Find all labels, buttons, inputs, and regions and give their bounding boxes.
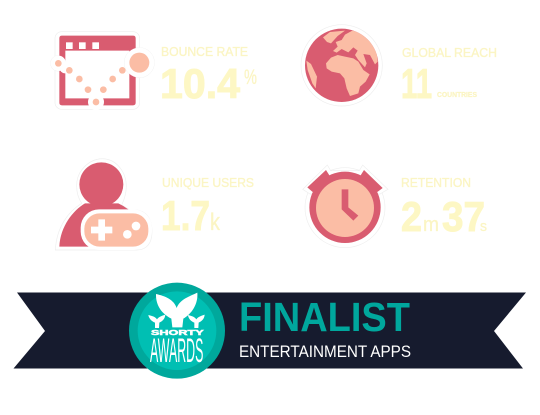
value: 2m 37s: m [423,214,439,236]
heading: finalist: FINALIST [239,294,410,340]
value: 1.7k: k [210,209,221,236]
panel: unique users [55,159,254,250]
value: 2m 37s: 37 [442,193,485,240]
icon: whale tails [148,293,205,328]
heading: bounce rate: BOUNCE RATE [161,45,248,59]
value: 2m 37s: s [480,218,487,235]
badge: shorty awards [129,283,225,379]
value: 10.4 percent: % [244,66,257,89]
panel: retention [303,165,487,248]
value: 11 countries: COUNTRIES [437,90,477,99]
value: 2m 37s: 2 [401,193,422,240]
value: 10.4 percent: 10.4 [160,60,241,107]
badge: shorty awards: AWARDS [150,332,203,370]
logo text: SHORTY [151,328,204,337]
ribbon shape [14,292,526,368]
heading: retention: RETENTION [401,176,471,190]
value: 11 countries: 11 [401,60,432,107]
icon: globe [301,25,382,106]
panel: bounce rate [51,32,257,110]
icon: alarm clock [303,165,388,248]
banner: finalist ribbon [14,283,526,379]
value: 2m 37s [401,193,487,240]
icon: browser window with bounce curve [51,32,154,110]
icon: user with game controller [55,159,152,250]
value: 11 countries [401,60,477,107]
heading: global reach: GLOBAL REACH [402,46,497,60]
heading: unique users: UNIQUE USERS [162,176,254,190]
value: 1.7k: 1.7 [161,192,210,239]
text: entertainment apps: ENTERTAINMENT APPS [239,342,411,361]
panel: global reach [301,25,497,107]
